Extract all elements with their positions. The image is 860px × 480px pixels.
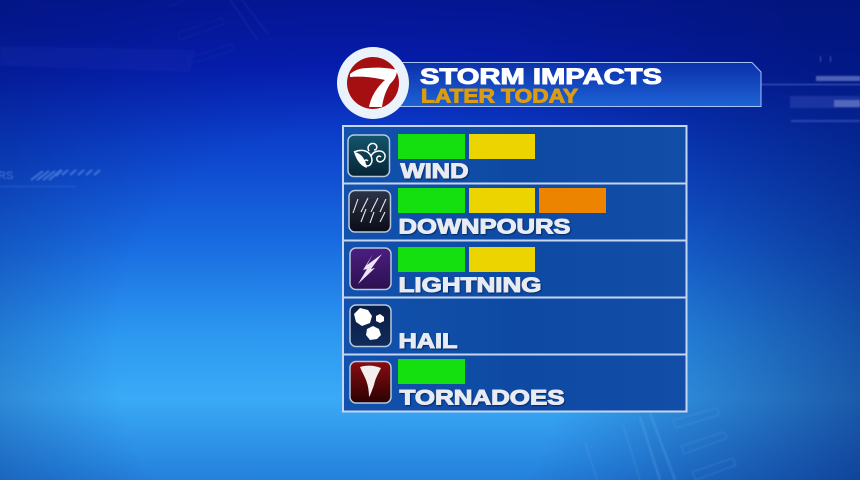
bar: orange bbox=[539, 188, 606, 213]
bar: green bbox=[398, 359, 465, 384]
label: hail: HAIL bbox=[398, 330, 458, 353]
icon: downpours bbox=[349, 190, 390, 232]
bar: green bbox=[398, 134, 465, 159]
background decoration: upper left shapes bbox=[0, 0, 268, 72]
row: downpours bbox=[349, 188, 606, 238]
label: lightning: LIGHTNING bbox=[398, 274, 542, 297]
row: lightning bbox=[350, 247, 542, 297]
background decoration: left ticker marks bbox=[0, 170, 100, 187]
icon: lightning bbox=[350, 248, 391, 290]
label: tornadoes: TORNADOES bbox=[400, 386, 564, 410]
row: hail bbox=[350, 305, 458, 353]
bar: yellow bbox=[469, 134, 535, 159]
bar: yellow bbox=[469, 247, 535, 272]
label: wind: WIND bbox=[400, 160, 468, 183]
panel: storm impacts table bbox=[343, 126, 686, 412]
bar: green bbox=[398, 247, 465, 272]
label: downpours: DOWNPOURS bbox=[398, 216, 570, 238]
station logo bbox=[337, 47, 409, 119]
icon: hail bbox=[350, 305, 391, 346]
row: tornadoes bbox=[350, 359, 564, 410]
row: wind bbox=[348, 134, 535, 183]
header banner bbox=[400, 62, 761, 108]
bar: green bbox=[398, 188, 465, 213]
background decoration: lower right shapes bbox=[585, 408, 736, 480]
subtitle: LATER TODAY bbox=[421, 86, 578, 108]
icon: wind bbox=[348, 135, 390, 176]
bar: yellow bbox=[469, 188, 535, 213]
background decoration: right data bars bbox=[760, 56, 860, 122]
title: STORM IMPACTS bbox=[420, 64, 662, 89]
icon: tornado bbox=[350, 362, 391, 403]
